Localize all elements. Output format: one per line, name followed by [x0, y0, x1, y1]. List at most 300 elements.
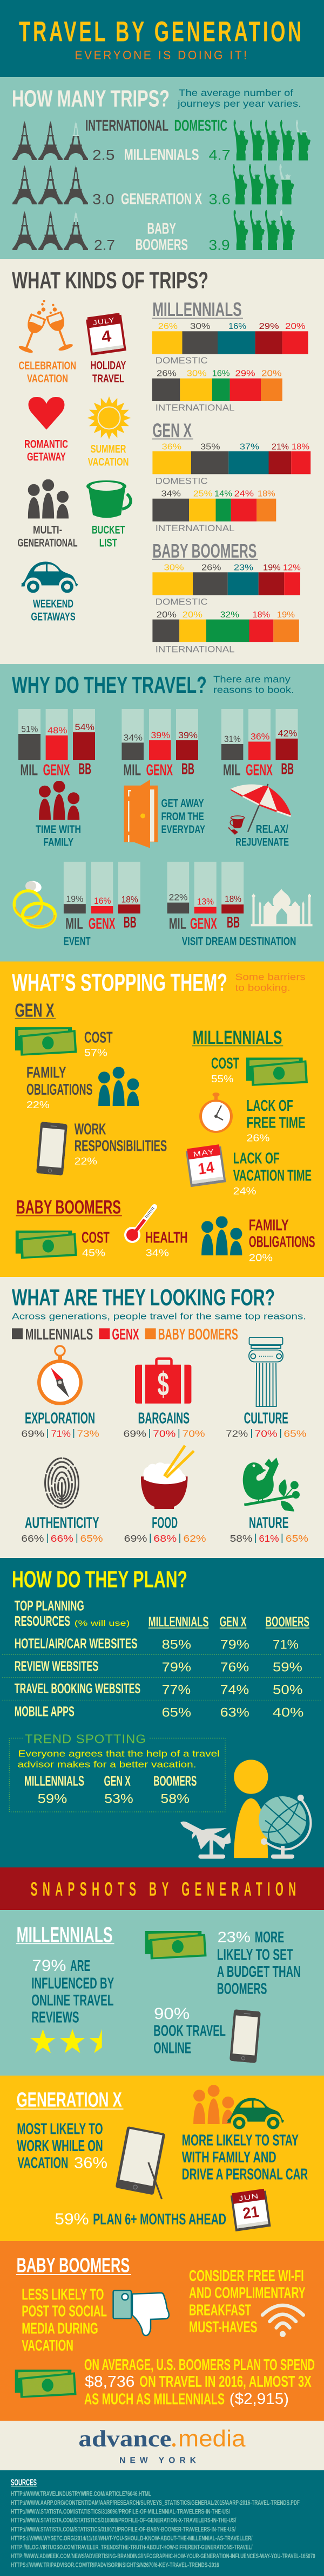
stacked bar: boomers domestic: 26%: [201, 564, 221, 573]
stat: authenticity: 65%: [80, 1533, 103, 1544]
stat row: millennials: MILLENNIALS: [124, 147, 199, 164]
table: top planning resources: HOTEL/AIR/CAR WEBSITES: [15, 1636, 137, 1652]
logo: advance media: advance: [78, 2427, 171, 2452]
stat: boomers family obligations: [249, 1217, 315, 1263]
icon: june 21 calendar: JUN: [238, 2192, 259, 2203]
stacked bar: boomers domestic: DOMESTIC: [156, 597, 208, 607]
icon: money: [15, 2369, 77, 2398]
panel: snapshots heading band: [0, 1867, 324, 1910]
icons: boomers domestic statues: [234, 210, 295, 250]
bar chart: visit dream destination: BB: [227, 914, 240, 931]
stacked bar: boomers international: 19%: [277, 610, 295, 620]
label: celebration vacation: [18, 360, 76, 385]
stat: less likely to post: VACATION: [22, 2337, 73, 2354]
table: top planning resources: 79%: [220, 1638, 249, 1652]
callout: trend spotting: 59%: [38, 1791, 67, 1806]
text block: barriers: to booking.: [235, 982, 291, 993]
table: top planning resources: 59%: [273, 1660, 302, 1674]
stat row: generation x: 3.0: [92, 191, 114, 208]
icon: family orange: [193, 2085, 234, 2124]
stat: stay with family and drive: [182, 2132, 308, 2183]
stacked bar: gen x domestic: 18%: [292, 442, 309, 451]
stacked bar: boomers international: 20%: [157, 610, 177, 620]
stat: food: 69%: [124, 1533, 147, 1544]
label: holiday travel: TRAVEL: [92, 373, 124, 385]
stat: authenticity: AUTHENTICITY: [25, 1514, 99, 1531]
bar chart: event: [64, 862, 140, 948]
heading: why do they travel: WHY DO THEY TRAVEL?: [12, 672, 207, 698]
stat: lack of vacation time: 24%: [233, 1185, 256, 1197]
icons: gen x international eiffel towers: [12, 165, 88, 204]
legend: international and domestic: DOMESTIC: [174, 117, 227, 134]
stat: 90 percent book online: BOOK TRAVEL: [153, 2023, 226, 2040]
icons: gen x domestic statues: [233, 164, 294, 204]
icon: open door: [124, 780, 158, 848]
stat: bargains: [123, 1410, 205, 1439]
panel: how many trips: [0, 77, 324, 259]
icon: compass: [37, 1346, 83, 1405]
stat: 79 percent influenced by reviews: [31, 1957, 114, 2027]
stat row: generation x: GENERATION X: [121, 191, 202, 208]
stacked bar: gen x international: 25%: [193, 490, 212, 499]
stat: food: [124, 1514, 206, 1544]
label: relax rejuvenate: RELAX/: [256, 822, 288, 835]
table: top planning resources: RESOURCES: [15, 1613, 70, 1629]
panel: what's stopping them: [0, 961, 324, 1277]
bar chart: relax rejuvenate: [221, 709, 298, 779]
stacked bar: boomers domestic: 12%: [283, 564, 301, 573]
heading: gen x: [152, 420, 193, 442]
panel: how do they plan: [0, 1558, 324, 1867]
label: bucket list: [92, 524, 125, 549]
text block: source urls: [11, 2491, 315, 2569]
label: celebration vacation: CELEBRATION: [18, 360, 76, 372]
legend: generations: BABY BOOMERS: [158, 1326, 238, 1343]
icon: car: [21, 562, 78, 594]
stacked bar: gen x domestic: 35%: [200, 442, 220, 451]
icons: millennials international eiffel towers: [12, 121, 88, 160]
stat: work responsibilities: [75, 1121, 167, 1166]
stat: gen x family obligations: OBLIGATIONS: [26, 1081, 92, 1098]
stacked bar: gen x international: 14%: [214, 490, 232, 499]
label: relax rejuvenate: [235, 822, 289, 848]
bar chart: visit dream destination: GENX: [190, 915, 217, 932]
text block: free wi-fi must-haves: BREAKFAST: [189, 2302, 251, 2319]
icon: greek column: [249, 1337, 283, 1406]
table: top planning resources: MOBILE APPS: [15, 1703, 75, 1719]
icon: sand pail and shovel: [228, 816, 244, 835]
callout: trend spotting: BOOMERS: [153, 1773, 197, 1789]
icon: may 14 calendar: MAY: [193, 1148, 215, 1158]
stacked bar: boomers domestic: 19%: [263, 564, 281, 573]
icon: person: [234, 1760, 268, 1858]
stat row: baby boomers: [94, 220, 230, 253]
stat: 79 percent influenced by reviews: ARE: [70, 1957, 90, 1975]
stat: gen x family obligations: FAMILY: [26, 1064, 66, 1081]
stat: bargains: BARGAINS: [138, 1410, 190, 1427]
stacked bar: millennials domestic: [152, 322, 308, 366]
stat: lack of vacation time: [233, 1150, 312, 1197]
stat: health: [145, 1229, 188, 1258]
stacked bar: millennials domestic: DOMESTIC: [156, 355, 208, 366]
label: weekend getaways: [31, 598, 76, 623]
icon: may 14 calendar: [185, 1144, 226, 1187]
logo: advance media: media: [178, 2426, 246, 2452]
callout: trend spotting: advisor makes for a better vacation.: [17, 1759, 197, 1769]
stacked bar: gen x domestic: 36%: [162, 442, 181, 451]
icon: july 4 calendar: [86, 313, 126, 355]
stat: plan 6 months ahead: PLAN 6+ MONTHS AHEAD: [93, 2211, 226, 2228]
panel: header: [0, 0, 324, 77]
callout: trend spotting: 58%: [160, 1791, 190, 1806]
icon: sun: [87, 396, 131, 439]
stacked bar: gen x domestic: [152, 442, 310, 486]
bar chart: time with family: GENX: [43, 761, 70, 779]
stat: exploration: 73%: [77, 1428, 99, 1439]
icon: champagne glasses: [17, 300, 75, 354]
label: romantic getaway: ROMANTIC: [24, 438, 68, 451]
bar chart: get away from the everyday: 39%: [178, 731, 198, 740]
callout: trend spotting: [9, 1732, 225, 1812]
stat: culture: 72%: [226, 1428, 248, 1439]
icon: stopwatch: [199, 1093, 233, 1133]
label: get away from the everyday: FROM THE: [161, 810, 204, 823]
label: multi-generational: MULTI-: [33, 524, 62, 536]
stat: 23 percent set a budget: [217, 1929, 301, 1997]
label: weekend getaways: GETAWAYS: [31, 611, 76, 623]
stat: boomers family obligations: FAMILY: [249, 1217, 289, 1234]
label: summer vacation: SUMMER: [91, 443, 126, 455]
stat: boomers cost: COST: [82, 1229, 110, 1246]
label: relax rejuvenate: REJUVENATE: [235, 835, 289, 848]
bar chart: event: MIL: [65, 915, 83, 932]
bar chart: relax rejuvenate: BB: [281, 761, 294, 778]
stat: culture: 70%: [255, 1428, 278, 1439]
stat: less likely to post: MEDIA DURING: [22, 2320, 98, 2337]
stat: less likely to post: [22, 2286, 107, 2354]
icon: fingerprint: [45, 1458, 79, 1508]
stat: bargains: 69%: [123, 1428, 146, 1439]
stat: 23 percent set a budget: 23%: [218, 1929, 251, 1946]
icons: boomers international eiffel towers: [12, 211, 88, 250]
table: top planning resources: TOP PLANNING: [15, 1598, 84, 1614]
stat: lack of free time: 26%: [246, 1132, 269, 1144]
bar chart: get away from the everyday: GENX: [146, 761, 173, 779]
label: get away from the everyday: [161, 797, 205, 836]
stacked bar: gen x international: 24%: [234, 490, 254, 499]
heading: gen x: [15, 1000, 56, 1021]
bar chart: visit dream destination: [167, 862, 296, 948]
label: romantic getaway: GETAWAY: [27, 451, 66, 463]
bar chart: get away from the everyday: MIL: [123, 761, 141, 779]
bar chart: get away from the everyday: 39%: [151, 731, 170, 740]
bar chart: relax rejuvenate: GENX: [246, 761, 273, 779]
stat: nature: 61%: [259, 1533, 279, 1544]
stat: work responsibilities: RESPONSIBILITIES: [75, 1137, 167, 1155]
label: summer vacation: [88, 443, 129, 468]
stacked bar: boomers international: [152, 610, 299, 654]
stacked bar: millennials domestic: 16%: [228, 322, 246, 331]
text: new york: NEW YORK: [119, 2456, 200, 2465]
stacked bar: millennials domestic: 26%: [158, 322, 178, 331]
text block: source urls: HTTP://WWW.TRAVELINDUSTRYWIRE.COM/ARTICLE76046.HTML: [11, 2491, 151, 2497]
table: top planning resources: 79%: [162, 1660, 191, 1674]
bar chart: visit dream destination: 22%: [169, 892, 188, 902]
heading: sources: SOURCES: [11, 2477, 37, 2488]
stat: food: 68%: [153, 1533, 177, 1544]
stat: authenticity: [21, 1514, 103, 1544]
stat: bargains: 70%: [153, 1428, 176, 1439]
table: top planning resources: (% will use): [75, 1619, 130, 1628]
icon: two and a half stars: [30, 2029, 102, 2053]
bar chart: time with family: 48%: [48, 726, 68, 736]
text block: source urls: HTTP://WWW.STATISTA.COM/STATISTICS/318088/PROFILE-OF-GENERATION-X-TRAVELERS-IN-THE-US/: [11, 2518, 237, 2524]
label: bucket list: BUCKET: [92, 524, 125, 536]
heading: how many trips: HOW MANY TRIPS?: [12, 86, 170, 112]
stat: most likely to work: VACATION: [17, 2155, 68, 2172]
stat: less likely to post: LESS LIKELY TO: [22, 2286, 104, 2303]
stat: nature: [230, 1514, 308, 1544]
table: top planning resources: 40%: [273, 1705, 303, 1720]
panel: generation x snapshot: [0, 2076, 324, 2241]
stat: gen x cost: 57%: [84, 1047, 107, 1058]
icon: thumbs down: [113, 2291, 169, 2335]
table: top planning resources: 85%: [162, 1638, 191, 1652]
stat: food: FOOD: [152, 1514, 178, 1531]
stat: 90 percent book online: ONLINE: [153, 2039, 191, 2057]
stat row: baby boomers: 2.7: [94, 237, 115, 253]
heading: what's stopping them: WHAT’S STOPPING THEM?: [12, 968, 227, 996]
stat: culture: CULTURE: [244, 1410, 288, 1427]
text block: boomers spending: [84, 2357, 315, 2408]
heading: gen x: GEN X: [152, 420, 192, 442]
text block: intro: journeys per year varies.: [177, 98, 301, 109]
stacked bar: gen x domestic: 37%: [240, 442, 259, 451]
label: romantic getaway: [24, 438, 68, 463]
label: get away from the everyday: GET AWAY: [161, 797, 204, 810]
icon: june 21 calendar: 21: [242, 2203, 260, 2223]
text block: source urls: HTTPS://WWW.TRIPADVISOR.COM/TRIPADVISORINSIGHTS/N2670/6-KEY-TRAVEL-TRENDS-2016: [11, 2563, 219, 2569]
legend: generations: GENX: [112, 1326, 139, 1343]
label: bucket list: LIST: [99, 537, 117, 549]
stacked bar: millennials international: 20%: [261, 369, 282, 379]
table: top planning resources: 63%: [220, 1705, 249, 1720]
stat: nature: 65%: [286, 1533, 308, 1544]
icon: wedding rings: [14, 880, 55, 927]
heading: baby boomers: BABY BOOMERS: [152, 540, 256, 562]
stacked bar: millennials domestic: 30%: [190, 322, 211, 331]
bar chart: time with family: BB: [78, 761, 91, 778]
stacked bar: boomers domestic: [152, 564, 301, 607]
label: time with family: [36, 823, 81, 848]
heading: millennials: MILLENNIALS: [152, 298, 242, 320]
panel: logo: [0, 2421, 324, 2470]
bar chart: relax rejuvenate: 36%: [251, 732, 270, 742]
heading: baby boomers: BABY BOOMERS: [16, 1197, 121, 1218]
stat: work responsibilities: WORK: [75, 1121, 106, 1138]
table: top planning resources: 71%: [273, 1638, 299, 1652]
text block: many reasons: There are many: [213, 674, 291, 685]
stat: boomers cost: [82, 1229, 110, 1258]
stat: health: 34%: [146, 1247, 169, 1258]
bar chart: visit dream destination: 18%: [225, 895, 241, 904]
text block: free wi-fi must-haves: MUST-HAVES: [189, 2319, 257, 2336]
stacked bar: millennials international: 26%: [157, 369, 177, 379]
heading: sources: [11, 2477, 37, 2488]
stat: plan 6 months ahead: 59%: [55, 2210, 89, 2228]
callout: trend spotting: TREND SPOTTING: [25, 1732, 146, 1746]
stat row: millennials: 2.5: [92, 147, 114, 163]
label: celebration vacation: VACATION: [27, 373, 68, 385]
label: get away from the everyday: EVERYDAY: [161, 823, 205, 836]
panel: what kinds of trips: [0, 259, 324, 664]
stacked bar: gen x domestic: 21%: [272, 442, 289, 451]
label: multi-generational: GENERATIONAL: [17, 537, 78, 549]
legend: generations: [12, 1326, 238, 1343]
stat: nature: NATURE: [249, 1514, 289, 1531]
stat: 79 percent influenced by reviews: 79%: [32, 1957, 66, 1975]
stat: lack of vacation time: LACK OF: [233, 1150, 280, 1167]
stacked bar: boomers domestic: 23%: [234, 564, 253, 573]
heading: how do they plan: HOW DO THEY PLAN?: [12, 1566, 187, 1592]
stat: most likely to work: WORK WHILE ON: [17, 2138, 103, 2155]
logo: advance media: [78, 2426, 246, 2452]
icon: bucket: [86, 480, 131, 518]
stat: 90 percent book online: [153, 2005, 226, 2057]
table: top planning resources: MILLENNIALS: [148, 1613, 208, 1630]
bar chart: event: 18%: [122, 895, 138, 904]
stat row: millennials: 4.7: [208, 147, 231, 163]
stacked bar: millennials international: 16%: [212, 369, 230, 379]
stat: culture: [226, 1410, 307, 1439]
bar chart: event: 16%: [94, 896, 111, 906]
bar chart: event: GENX: [89, 915, 116, 932]
text block: barriers: Some barriers: [235, 972, 306, 983]
text block: source urls: HTTP://WWW.STATISTA.COM/STATISTICS/318096/PROFILE-OF-MILLENNIAL-TRAVELERS-IN-THE-US/: [11, 2509, 231, 2516]
callout: trend spotting: MILLENNIALS: [24, 1773, 84, 1789]
icon: heart: [29, 397, 64, 430]
stacked bar: millennials international: 30%: [187, 369, 207, 379]
icon: family: [28, 479, 69, 519]
panel: baby boomers snapshot: [0, 2241, 324, 2421]
text block: many reasons: reasons to book.: [213, 684, 294, 695]
stat: gen x family obligations: [26, 1064, 92, 1110]
icon: green car: [227, 2098, 284, 2131]
stacked bar: millennials domestic: 20%: [285, 322, 306, 331]
stat: food: 62%: [184, 1533, 206, 1544]
label: weekend getaways: WEEKEND: [33, 598, 73, 610]
table: top planning resources: REVIEW WEBSITES: [15, 1658, 98, 1674]
icon: may 14 calendar: 14: [197, 1159, 215, 1178]
bar chart: event: BB: [124, 914, 137, 931]
callout: trend spotting: Everyone agrees that the help of a travel: [18, 1748, 220, 1758]
icon: money: [145, 1931, 207, 1960]
icon: beach umbrella: [231, 784, 291, 832]
table: top planning resources: TRAVEL BOOKING WEBSITES: [15, 1680, 140, 1696]
icon: rice bowl with chopsticks: [141, 1446, 194, 1509]
icon: suitcase: $: [158, 1366, 169, 1403]
stat: bargains: 70%: [183, 1428, 205, 1439]
stat: 90 percent book online: 90%: [154, 2005, 190, 2023]
bar chart: event: 19%: [66, 895, 84, 904]
bar chart: time with family: [18, 709, 95, 779]
stat: 79 percent influenced by reviews: REVIEWS: [31, 2009, 79, 2027]
stat: 23 percent set a budget: MORE: [255, 1929, 284, 1946]
stacked bar: millennials international: INTERNATIONAL: [156, 403, 234, 413]
icon: july 4 calendar: JULY: [92, 316, 116, 327]
icon: family teal: [98, 1067, 139, 1106]
icon: thermometer: [124, 1207, 154, 1243]
panel: sources: [0, 2470, 324, 2576]
stacked bar: gen x international: INTERNATIONAL: [156, 523, 234, 533]
stacked bar: gen x international: 18%: [258, 490, 275, 499]
stacked bar: gen x domestic: DOMESTIC: [156, 476, 208, 486]
table: top planning resources: 76%: [220, 1660, 249, 1674]
icon: taj mahal: [251, 889, 313, 926]
stacked bar: boomers international: 18%: [253, 610, 270, 620]
bar chart: time with family: 54%: [75, 723, 94, 732]
stat: less likely to post: POST TO SOCIAL: [22, 2303, 107, 2320]
stat: nature: 58%: [230, 1533, 253, 1544]
stat row: baby boomers: BABY: [147, 220, 176, 237]
stat: millennials cost: 55%: [211, 1073, 233, 1084]
stat: boomers cost: 45%: [82, 1247, 105, 1258]
panel: why do they travel: [0, 664, 324, 961]
text block: barriers: [235, 972, 306, 993]
label: time with family: TIME WITH: [36, 823, 81, 836]
stacked bar: boomers international: INTERNATIONAL: [156, 644, 234, 654]
stat: millennials cost: [211, 1055, 239, 1084]
stat: boomers family obligations: 20%: [249, 1252, 273, 1263]
text block: top reasons: Across generations, people travel for the same top reasons.: [12, 1311, 306, 1322]
table: top planning resources: 77%: [162, 1683, 191, 1698]
bar chart: get away from the everyday: BB: [181, 761, 194, 778]
text block: boomers spending: ($2,915): [230, 2390, 289, 2408]
bar chart: visit dream destination: MIL: [169, 915, 186, 932]
icon: money: [246, 1057, 308, 1086]
table: top planning resources: 50%: [273, 1683, 302, 1698]
icon: money: [15, 1027, 77, 1056]
icon: tablet and stylus: [116, 2126, 165, 2199]
label: multi-generational: [17, 524, 78, 549]
stat: lack of free time: LACK OF: [246, 1097, 293, 1115]
icon: money: [16, 1231, 77, 1259]
stacked bar: gen x international: [152, 490, 276, 533]
icon: suitcase: [135, 1359, 191, 1404]
stat: plan 6 months ahead: [55, 2210, 226, 2228]
bar chart: visit dream destination: 13%: [197, 897, 214, 907]
stat: gen x cost: COST: [84, 1029, 113, 1046]
stat: 79 percent influenced by reviews: ONLINE TRAVEL: [31, 1992, 114, 2009]
stat: work responsibilities: 22%: [75, 1155, 97, 1166]
label: holiday travel: HOLIDAY: [91, 359, 126, 372]
stacked bar: boomers international: 20%: [183, 610, 202, 620]
stat: lack of free time: [246, 1097, 306, 1144]
table: top planning resources: 74%: [220, 1683, 249, 1698]
stacked bar: boomers domestic: 30%: [164, 564, 184, 573]
stacked bar: gen x international: 34%: [161, 490, 181, 499]
bar chart: time with family: 51%: [21, 724, 38, 734]
stat: most likely to work: [17, 2120, 107, 2172]
stat: gen x cost: [84, 1029, 113, 1058]
stat: most likely to work: MOST LIKELY TO: [17, 2120, 103, 2138]
stat: exploration: EXPLORATION: [25, 1410, 95, 1427]
bar chart: time with family: MIL: [21, 761, 38, 779]
text block: free wi-fi must-haves: [189, 2268, 306, 2336]
stat: exploration: 69%: [21, 1428, 44, 1439]
icon: july 4 calendar: 4: [100, 327, 112, 346]
stacked bar: millennials international: [152, 369, 282, 413]
